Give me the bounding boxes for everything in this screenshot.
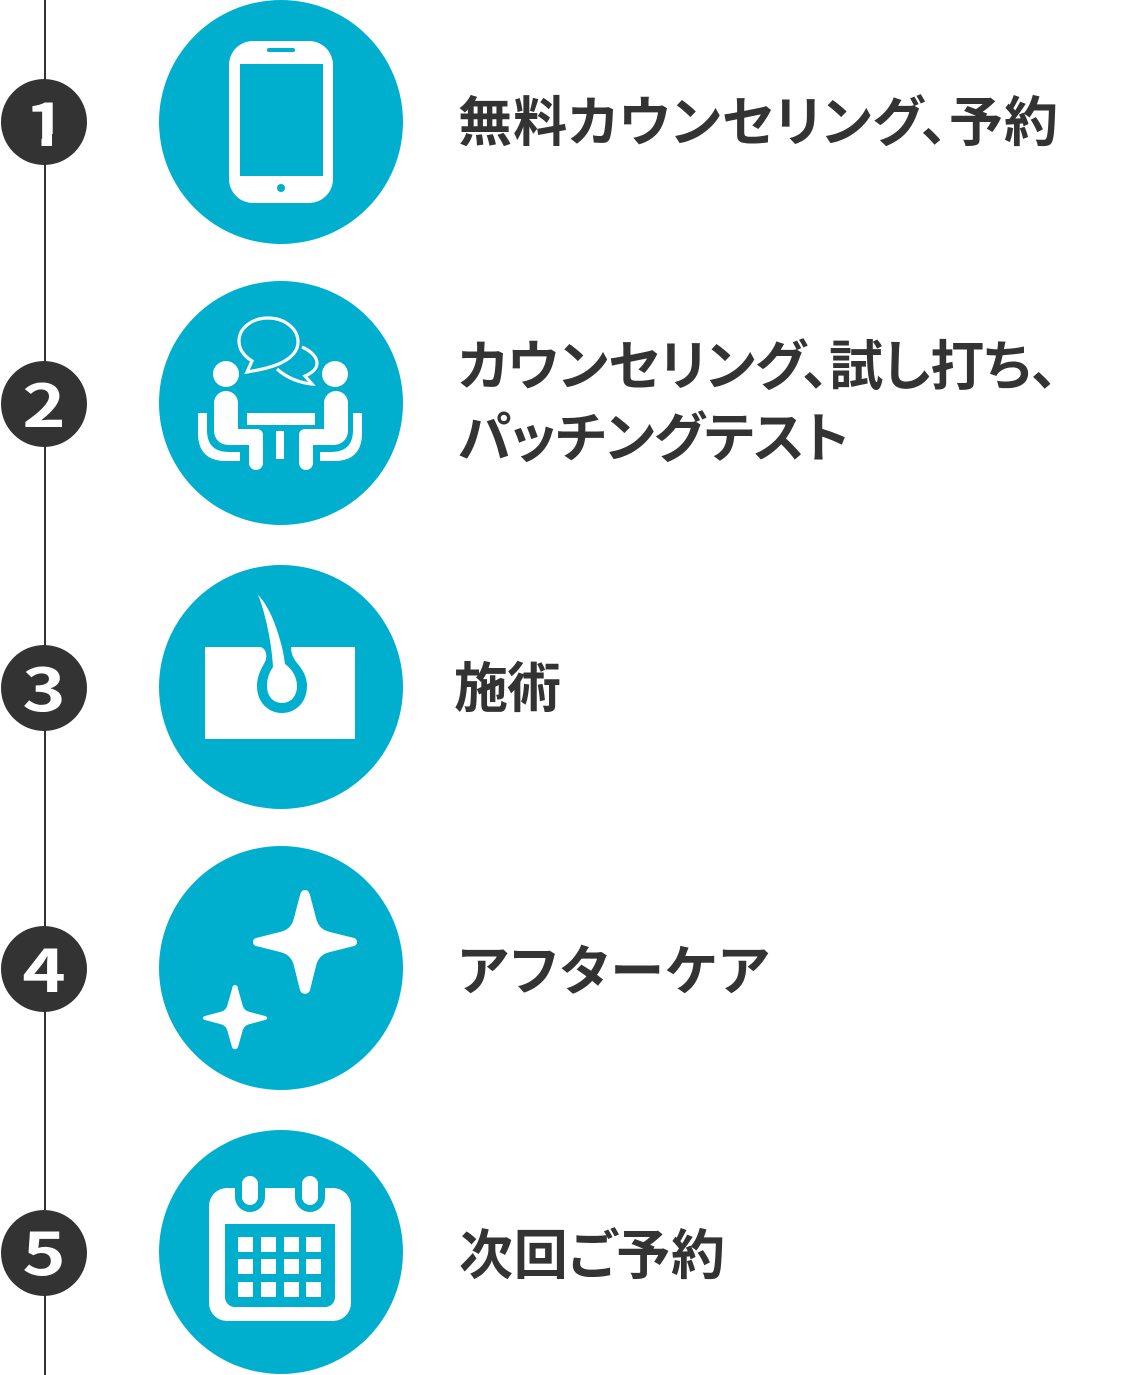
- step 3: [1, 565, 561, 809]
- timeline line: [44, 0, 46, 1375]
- number badge 5: [1, 1208, 87, 1296]
- label: step 2: パッチングテスト: [458, 409, 849, 469]
- number badge 1: 1: [25, 78, 67, 163]
- label: step 2: [458, 337, 1058, 469]
- step 4: [1, 846, 769, 1090]
- number badge 2: 2: [22, 360, 66, 445]
- label: step 4: アフターケア: [458, 942, 769, 1002]
- label: step 1: 無料カウンセリング、予約: [458, 93, 1058, 153]
- step 2: [1, 281, 1058, 525]
- number badge 2: [1, 360, 87, 447]
- step 1: [1, 0, 1058, 244]
- number badge 4: 4: [22, 925, 66, 1010]
- label: step 5: 次回ご予約: [459, 1226, 725, 1286]
- number badge 5: 5: [22, 1208, 66, 1293]
- icon: sparkles: [159, 846, 403, 1090]
- number badge 3: [1, 644, 87, 731]
- step 5: [1, 1130, 725, 1374]
- label: step 3: 施術: [454, 659, 561, 719]
- number badge 3: 3: [22, 644, 66, 729]
- icon: counseling meeting: [159, 281, 403, 525]
- icon: smartphone: [159, 0, 403, 244]
- icon: calendar: [159, 1130, 403, 1374]
- icon: hair follicle: [159, 565, 403, 809]
- number badge 4: [1, 925, 87, 1012]
- label: step 2: カウンセリング、試し打ち、: [458, 337, 1058, 397]
- number badge 1: [1, 78, 87, 165]
